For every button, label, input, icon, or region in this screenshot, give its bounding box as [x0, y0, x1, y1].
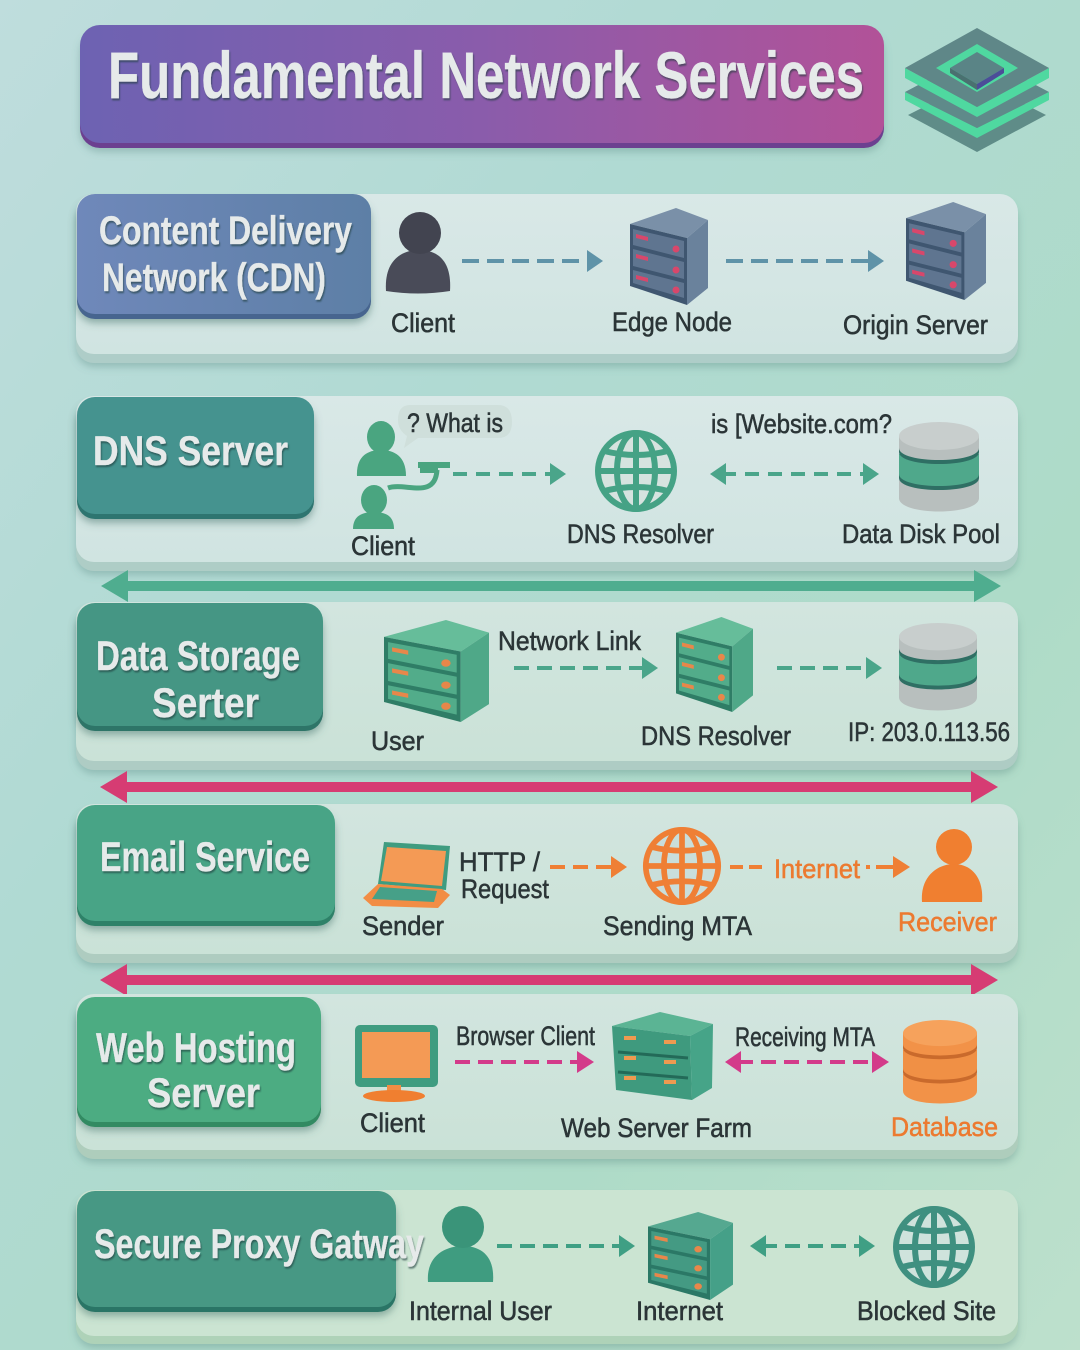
label: Network Link: Network Link: [498, 626, 641, 656]
label: Blocked Site: Blocked Site: [857, 1296, 996, 1326]
text: is [Website.com?: is [Website.com?: [711, 409, 892, 439]
icon: origin server: [906, 202, 986, 300]
arrow: pink double connector one: [100, 771, 998, 803]
label: Internal User: Internal User: [409, 1296, 552, 1326]
icon: receiver person: [922, 829, 982, 902]
heading: Data Storage: [77, 603, 323, 731]
panel: Data Storage Server: [76, 602, 1018, 770]
heading: Web Hosting: Web Hosting: [96, 1024, 296, 1071]
label: Request: Request: [461, 874, 549, 904]
heading: Email Service: Email Service: [100, 833, 310, 880]
heading: Secure Proxy Gatway: Secure Proxy Gatway: [94, 1220, 424, 1267]
icon: DNS resolver server: [676, 617, 753, 712]
title: Fundamental Network Services: [108, 38, 864, 112]
callout: What is: ? What is: [407, 408, 503, 438]
icon: edge node server: [630, 208, 708, 305]
label: Internet: Internet: [636, 1296, 723, 1326]
arrow: client to resolver: [453, 463, 566, 485]
label: Browser Client: Browser Client: [456, 1021, 595, 1051]
arrow: sender to MTA: [550, 856, 627, 878]
icon: stacked layers logo: [905, 28, 1049, 152]
icon: laptop: [363, 842, 450, 908]
title banner: [80, 25, 884, 148]
heading: Web Hosting: [77, 997, 321, 1127]
arrow: resolver to disk pool: [710, 463, 879, 485]
icon: blocked site globe: [895, 1208, 973, 1286]
arrow: pink double connector two: [100, 964, 998, 996]
label: DNS Resolver: DNS Resolver: [567, 519, 714, 549]
icon: internal user: [428, 1206, 493, 1282]
icon: data disk: [899, 623, 977, 711]
label: IP address: IP: 203.0.113.56: [848, 717, 1010, 747]
icon: user server: [384, 620, 489, 722]
panel: Email Service: [76, 804, 1018, 963]
heading: Data Storage: Serter: [152, 679, 259, 726]
arrow: edge to origin: [726, 250, 884, 272]
label: User: User: [371, 726, 424, 756]
label: Edge Node: Edge Node: [612, 307, 732, 337]
heading: Secure Proxy Gatway: [77, 1191, 424, 1312]
icon: internet server: [648, 1212, 733, 1300]
heading: DNS Server: DNS Server: [93, 427, 288, 474]
icon: DNS resolver globe: [597, 432, 675, 510]
label: Web Server Farm: Web Server Farm: [561, 1113, 752, 1143]
panel: Web Hosting Server: [76, 994, 1018, 1159]
label: Client: Client: [391, 308, 455, 338]
arrow: resolver to disk: [777, 657, 882, 679]
label: Receiver: Receiver: [898, 907, 997, 937]
arrow: user to internet: [497, 1235, 635, 1257]
icon: database: [903, 1020, 977, 1104]
label: HTTP Request: HTTP /: [459, 847, 540, 877]
panel: Content Delivery Network: [76, 194, 1018, 363]
label: Client: Client: [360, 1108, 425, 1138]
icon: client people with key: [353, 421, 450, 529]
arrow: browser to server: [455, 1051, 594, 1073]
icon: client monitor: [355, 1025, 438, 1102]
icon: data disk pool: [899, 422, 979, 512]
label: Sender: Sender: [362, 911, 444, 941]
heading: DNS Server: [77, 397, 314, 519]
panel: Secure Proxy Gateway: [76, 1190, 1018, 1344]
heading: Web Hosting: Server: [147, 1069, 260, 1116]
icon: web server farm: [612, 1012, 713, 1100]
label: Receiving MTA: Receiving MTA: [735, 1022, 875, 1052]
panel: DNS Server: [76, 396, 1018, 571]
heading: Data Storage: Data Storage: [96, 632, 300, 679]
icon: sending MTA globe: [645, 829, 719, 903]
label: Data Disk Pool: Data Disk Pool: [842, 519, 1000, 549]
callout: What is: [398, 405, 512, 448]
label: Sending MTA: Sending MTA: [603, 911, 752, 941]
label: Internet: Internet: [774, 854, 860, 884]
label: DNS Resolver: DNS Resolver: [641, 721, 791, 751]
heading: CDN: Network (CDN): [102, 256, 326, 300]
arrow: internet to blocked site: [750, 1235, 875, 1257]
heading: CDN: [77, 194, 371, 319]
heading: CDN: Content Delivery: [99, 209, 353, 253]
heading: Email Service: [77, 805, 335, 926]
label: Origin Server: Origin Server: [843, 310, 988, 340]
arrow: green double connector: [101, 570, 1001, 602]
arrow: user to resolver: [514, 657, 658, 679]
arrow: MTA to internet: [730, 856, 910, 878]
arrow: server to database: [725, 1051, 889, 1073]
label: Client: Client: [351, 531, 415, 561]
label: Database: Database: [891, 1112, 998, 1142]
arrow: client to edge: [462, 250, 603, 272]
icon: client person: [386, 212, 450, 294]
